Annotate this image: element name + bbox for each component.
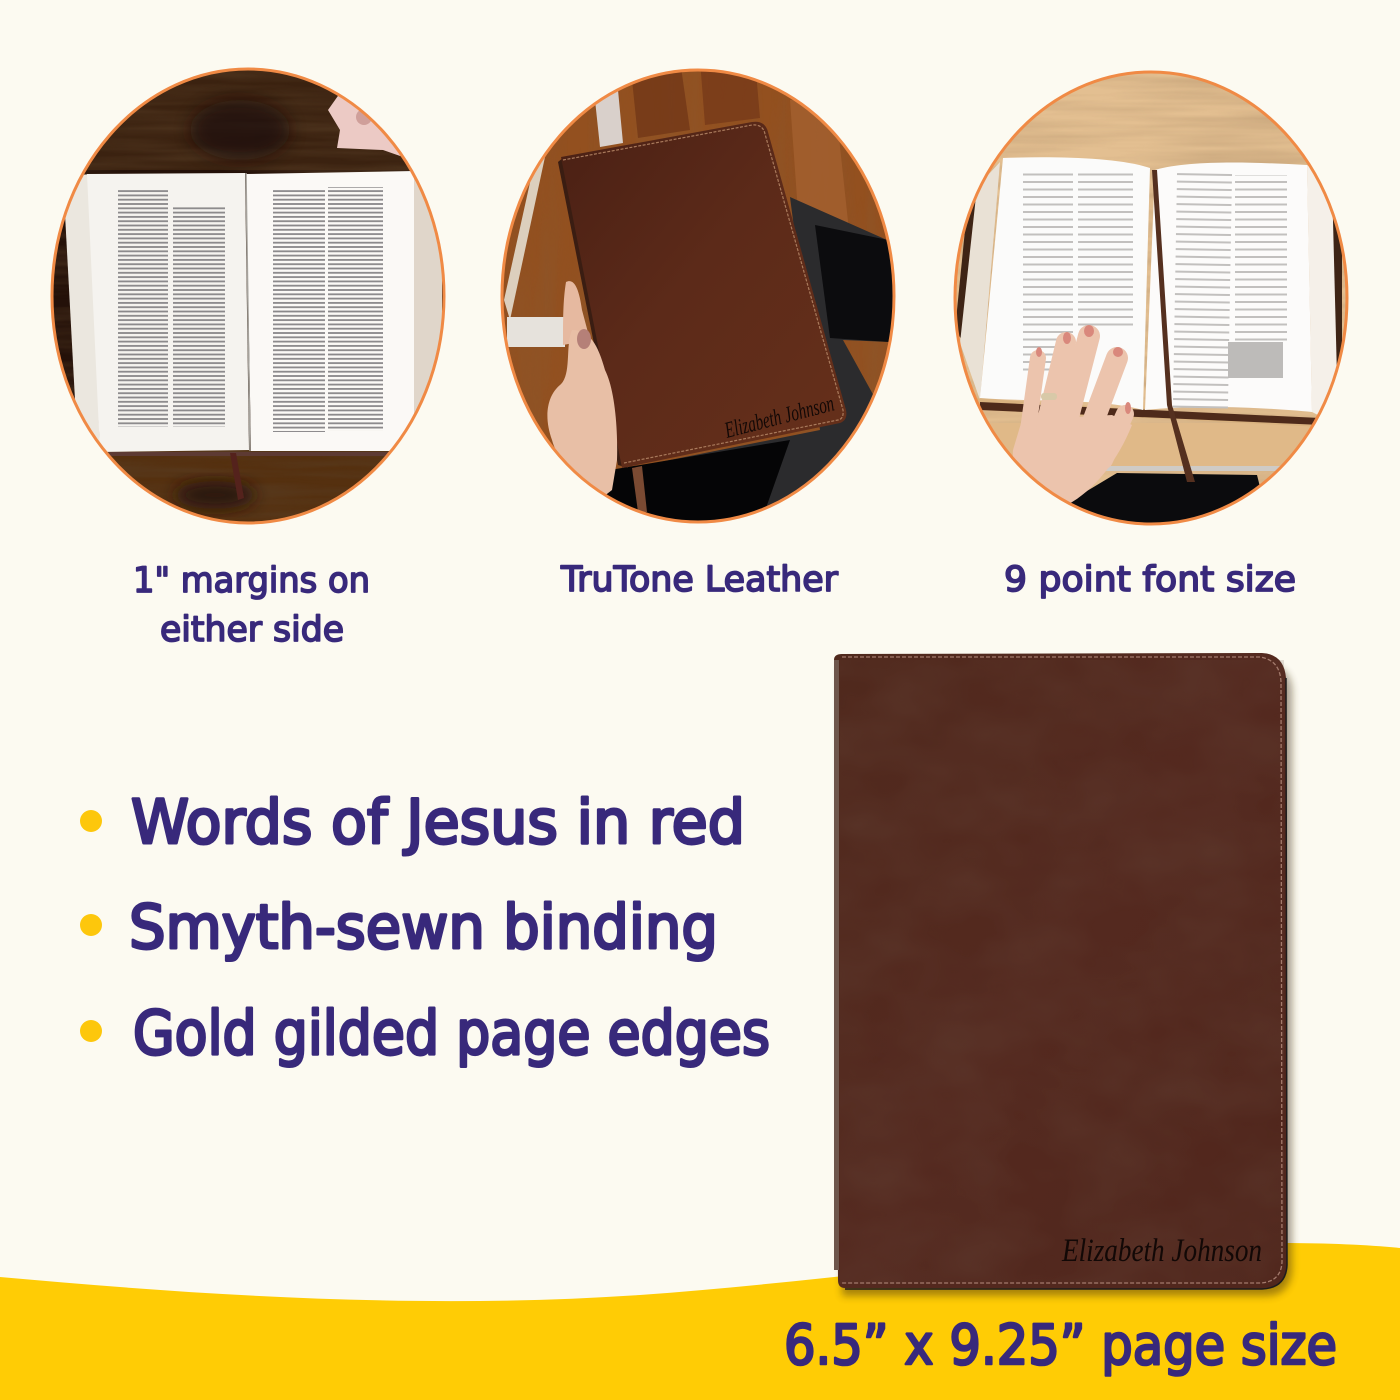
ribbon bbox=[230, 453, 244, 500]
left page bbox=[980, 157, 1150, 410]
black jeans bbox=[663, 197, 888, 506]
page text columns bbox=[118, 189, 168, 427]
engraved name: Elizabeth Johnson bbox=[1061, 1233, 1262, 1269]
book spine bbox=[558, 157, 628, 468]
rose bbox=[328, 96, 401, 156]
photo: open Bible on dark wood bbox=[40, 60, 460, 530]
caption: margins bbox=[133, 561, 370, 650]
finger bbox=[563, 281, 590, 345]
hand bbox=[547, 330, 617, 497]
caption: leather: TruTone Leather bbox=[560, 560, 839, 600]
page edges bbox=[65, 174, 100, 442]
large leather Bible bbox=[834, 653, 1292, 1296]
right page bbox=[246, 171, 414, 451]
caption: margins: either side bbox=[160, 610, 344, 650]
ribbon marker bbox=[1152, 170, 1195, 482]
hand bbox=[1013, 325, 1132, 505]
book cover bbox=[561, 122, 846, 468]
page text bbox=[1023, 170, 1073, 375]
ribbon bbox=[632, 466, 647, 512]
feature list bbox=[80, 787, 770, 1069]
white table frame bbox=[595, 90, 623, 147]
feature: red letter: Words of Jesus in red bbox=[131, 787, 745, 858]
cover bbox=[956, 202, 976, 338]
yellow wave band bbox=[0, 1243, 1400, 1400]
caption: font size: 9 point font size bbox=[1004, 560, 1296, 600]
engraved name on book: Elizabeth Johnson bbox=[721, 391, 837, 443]
photo: hand on open Bible pages on light wood bbox=[945, 60, 1365, 530]
fore edges bbox=[960, 162, 1000, 400]
feature: page edges: Gold gilded page edges bbox=[133, 998, 770, 1069]
photo: hand holding leather Bible bbox=[490, 60, 910, 530]
black cloth bbox=[1071, 473, 1260, 522]
caption: margins: 1" margins on bbox=[133, 561, 370, 601]
left page bbox=[87, 173, 249, 452]
caption: page size: 6.5” x 9.25” page size bbox=[784, 1313, 1337, 1377]
feature: binding: Smyth-sewn binding bbox=[129, 892, 718, 963]
bottom edge and strap bbox=[975, 398, 1322, 427]
right page bbox=[1145, 163, 1312, 412]
